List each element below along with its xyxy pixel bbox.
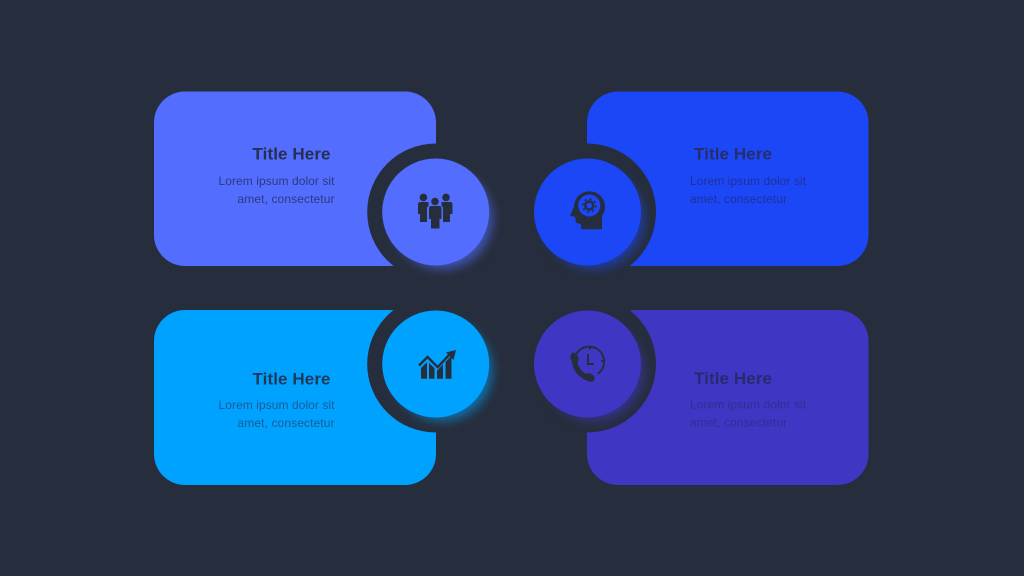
text: bottom left: amet, consectetur: [238, 416, 334, 430]
text: top left: amet, consectetur: [238, 192, 334, 206]
ring: bottom left: [367, 296, 504, 432]
text: top left: Lorem ipsum dolor sit: [218, 174, 335, 188]
title: top right: Title Here: [694, 144, 772, 164]
panel: bottom left: [154, 296, 504, 485]
ring: top left: [367, 144, 504, 280]
card: top left: [154, 92, 436, 266]
circle: bottom left: [382, 310, 489, 418]
icon: rising chart: [419, 350, 456, 379]
title: top left: Title Here: [252, 144, 330, 164]
title: bottom left: Title Here: [252, 370, 330, 388]
glow: bottom left: [392, 321, 492, 421]
text: top right: [690, 174, 807, 206]
text: top left: [218, 174, 335, 206]
text: bottom left: [218, 398, 335, 430]
icon: team of people: [418, 194, 452, 228]
card: top right: [587, 92, 868, 266]
icon: head with gear: [570, 191, 605, 229]
card: bottom right: [587, 310, 868, 485]
glow: top left: [392, 169, 492, 269]
ring: top right: [519, 144, 656, 280]
icon: phone with clock: [569, 346, 604, 383]
glow: top right: [544, 169, 644, 269]
card: bottom left: [154, 310, 436, 485]
circle: top right: [534, 158, 641, 266]
ring: bottom right: [519, 296, 656, 432]
text: bottom right: [690, 398, 807, 430]
text: bottom right: amet, consectetur: [690, 416, 787, 430]
circle: bottom right: [534, 310, 641, 418]
text: top right: Lorem ipsum dolor sit: [690, 174, 807, 188]
text: bottom right: Lorem ipsum dolor sit: [690, 398, 807, 412]
panel: top right: [519, 92, 868, 280]
text: top right: amet, consectetur: [690, 192, 787, 206]
circle: top left: [382, 158, 489, 266]
panel: top left: [154, 92, 504, 280]
glow: bottom right: [544, 321, 644, 421]
title: bottom right: Title Here: [694, 369, 772, 388]
text: bottom left: Lorem ipsum dolor sit: [218, 398, 335, 412]
panel: bottom right: [519, 296, 868, 485]
